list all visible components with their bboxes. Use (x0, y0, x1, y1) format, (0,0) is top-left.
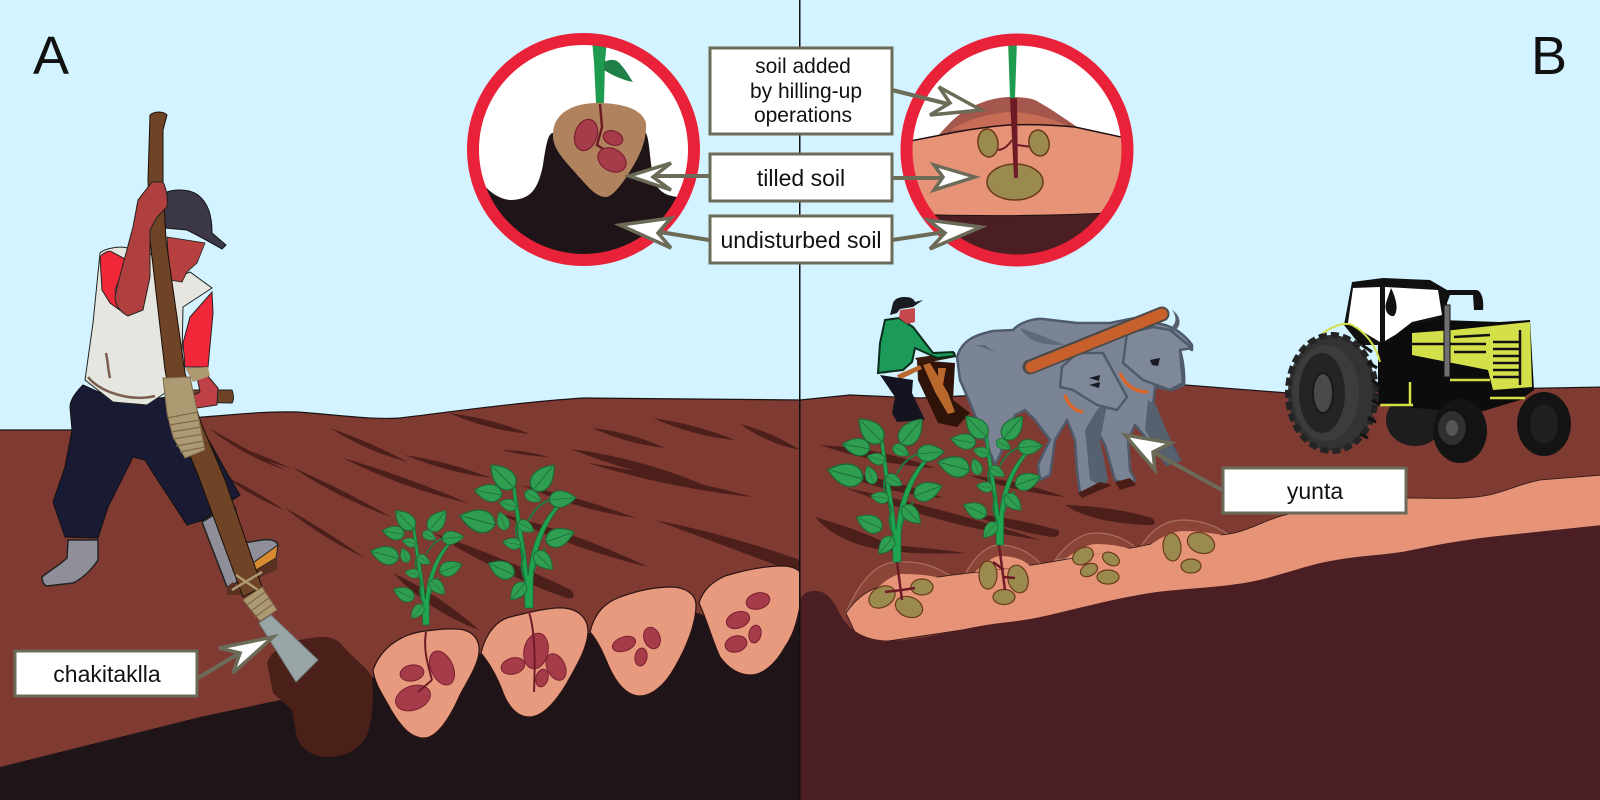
tubers A (392, 590, 772, 715)
collars (1065, 373, 1148, 412)
ring B (906, 40, 1128, 260)
hat (155, 190, 226, 249)
ring A (473, 39, 694, 260)
potato plant A1 (368, 505, 465, 625)
face (167, 237, 205, 282)
magnifier B: hilled cross-section (900, 40, 1130, 270)
label: tilled soil: tilled soil (757, 165, 845, 191)
tubers B (865, 529, 1218, 621)
label: undisturbed soil: undisturbed soil (720, 227, 882, 253)
label: soil added by hilling-up operations: operations (754, 104, 852, 127)
root (597, 104, 605, 150)
ox eyes (1089, 358, 1160, 388)
furrows B (815, 445, 1155, 554)
tubers (976, 128, 1051, 200)
magnifier A: ridge cross-section (465, 39, 705, 270)
ox back shading (975, 328, 1065, 352)
arrow: chakitaklla to blade (198, 637, 273, 678)
ox hooves (1078, 478, 1136, 498)
centre divider (799, 0, 800, 800)
upper arm and hand (115, 182, 167, 316)
fender (1323, 324, 1380, 362)
right window (1385, 287, 1442, 343)
stem (1008, 40, 1017, 98)
heading: panel letter A: A (33, 26, 69, 86)
leaf (604, 60, 633, 82)
hat (890, 297, 923, 315)
horn (1168, 310, 1180, 332)
side roots (998, 140, 1030, 151)
plow wood (897, 363, 955, 414)
shirt folds (88, 353, 155, 398)
blade (259, 615, 318, 682)
crossbar (180, 390, 234, 403)
ox dark legs (1085, 400, 1180, 487)
left sleeve (100, 251, 128, 316)
canopy (1344, 278, 1483, 345)
potato plant A2 (457, 458, 577, 608)
arrow: soil added to hill (892, 87, 981, 115)
head (899, 308, 915, 324)
tilled ridges A (373, 566, 801, 738)
arrow: yunta to oxen (1125, 435, 1222, 490)
arrow: tilled soil to circle B (892, 165, 975, 190)
pink bumps under hills (866, 531, 1222, 600)
tilled soil circle B (912, 125, 1122, 216)
root (1010, 98, 1018, 178)
left boot (42, 540, 98, 586)
grille and hood lines (1412, 330, 1520, 385)
cross lashing (232, 572, 262, 590)
boundary line (912, 124, 1121, 142)
tilled soil in circle A (553, 103, 646, 197)
far rear wheel (1386, 394, 1444, 446)
arrow: undisturbed soil to circle A (620, 218, 709, 248)
boot sole (250, 545, 278, 570)
body (1378, 320, 1534, 412)
yoke (1030, 314, 1162, 367)
panel A: field with chakitaklla (0, 398, 801, 800)
front wheel (1433, 399, 1487, 463)
rear wheel (1288, 335, 1380, 451)
right boot (202, 507, 278, 587)
stem (592, 45, 606, 103)
hood (1412, 322, 1532, 390)
roots B (885, 545, 1015, 600)
near ox head (1060, 353, 1127, 410)
undisturbed soil circle B (934, 212, 1101, 254)
plow (917, 360, 970, 427)
left window (1348, 287, 1380, 342)
undisturbed dark soil A (0, 590, 800, 800)
steering post (1385, 288, 1397, 316)
undisturbed soil in circle A (486, 133, 677, 254)
lower rope binding (243, 587, 277, 621)
lower hand (188, 375, 218, 408)
handle (148, 112, 262, 597)
hill lower band (950, 112, 1075, 130)
sole shadow (227, 558, 277, 595)
label: tilled soil (710, 154, 892, 201)
right sleeve (183, 292, 213, 367)
ground surface A (0, 398, 800, 800)
potato plant B2 (935, 410, 1043, 545)
label: chakitaklla (15, 651, 197, 696)
arrow: tilled soil to circle A (629, 163, 709, 190)
cuff (185, 367, 210, 382)
furrows A (209, 413, 800, 630)
label: undisturbed soil (710, 216, 892, 263)
undisturbed dark soil B (800, 525, 1600, 800)
rope binding (163, 377, 205, 458)
oxen yunta (957, 310, 1192, 498)
tilled soil B (846, 475, 1600, 645)
ox silhouette (957, 318, 1192, 493)
ground surface B (800, 385, 1600, 800)
arrow: undisturbed soil to circle B (892, 220, 981, 249)
added soil hill (939, 97, 1077, 135)
label: yunta: yunta (1287, 478, 1343, 504)
tubers (574, 118, 627, 173)
plowman with plow (878, 297, 970, 427)
label: soil added by hilling-up operations: soil added (755, 55, 851, 78)
dug hole (267, 637, 373, 757)
yellow trim (1380, 380, 1525, 405)
heading: panel letter B: B (1531, 26, 1567, 86)
roots A (418, 612, 535, 692)
label: yunta (1223, 468, 1406, 513)
legs (880, 375, 925, 422)
tractor (1288, 278, 1571, 463)
panel B: field with yunta and tractor (800, 278, 1600, 800)
torso (878, 318, 955, 373)
potato plant B1 (825, 412, 945, 562)
far ox head (1123, 327, 1192, 390)
label: soil added by hilling-up operations: by hilling-up (750, 80, 862, 103)
trousers (53, 385, 240, 538)
plow handle (915, 352, 956, 364)
shirt (85, 247, 212, 405)
hilled soil ridges B (846, 520, 1229, 613)
far front wheel (1517, 392, 1571, 456)
exhaust (1444, 305, 1450, 377)
farmer with chakitaklla (42, 112, 318, 682)
label: chakitaklla: chakitaklla (53, 661, 161, 687)
label: soil added by hilling-up operations (710, 48, 892, 134)
